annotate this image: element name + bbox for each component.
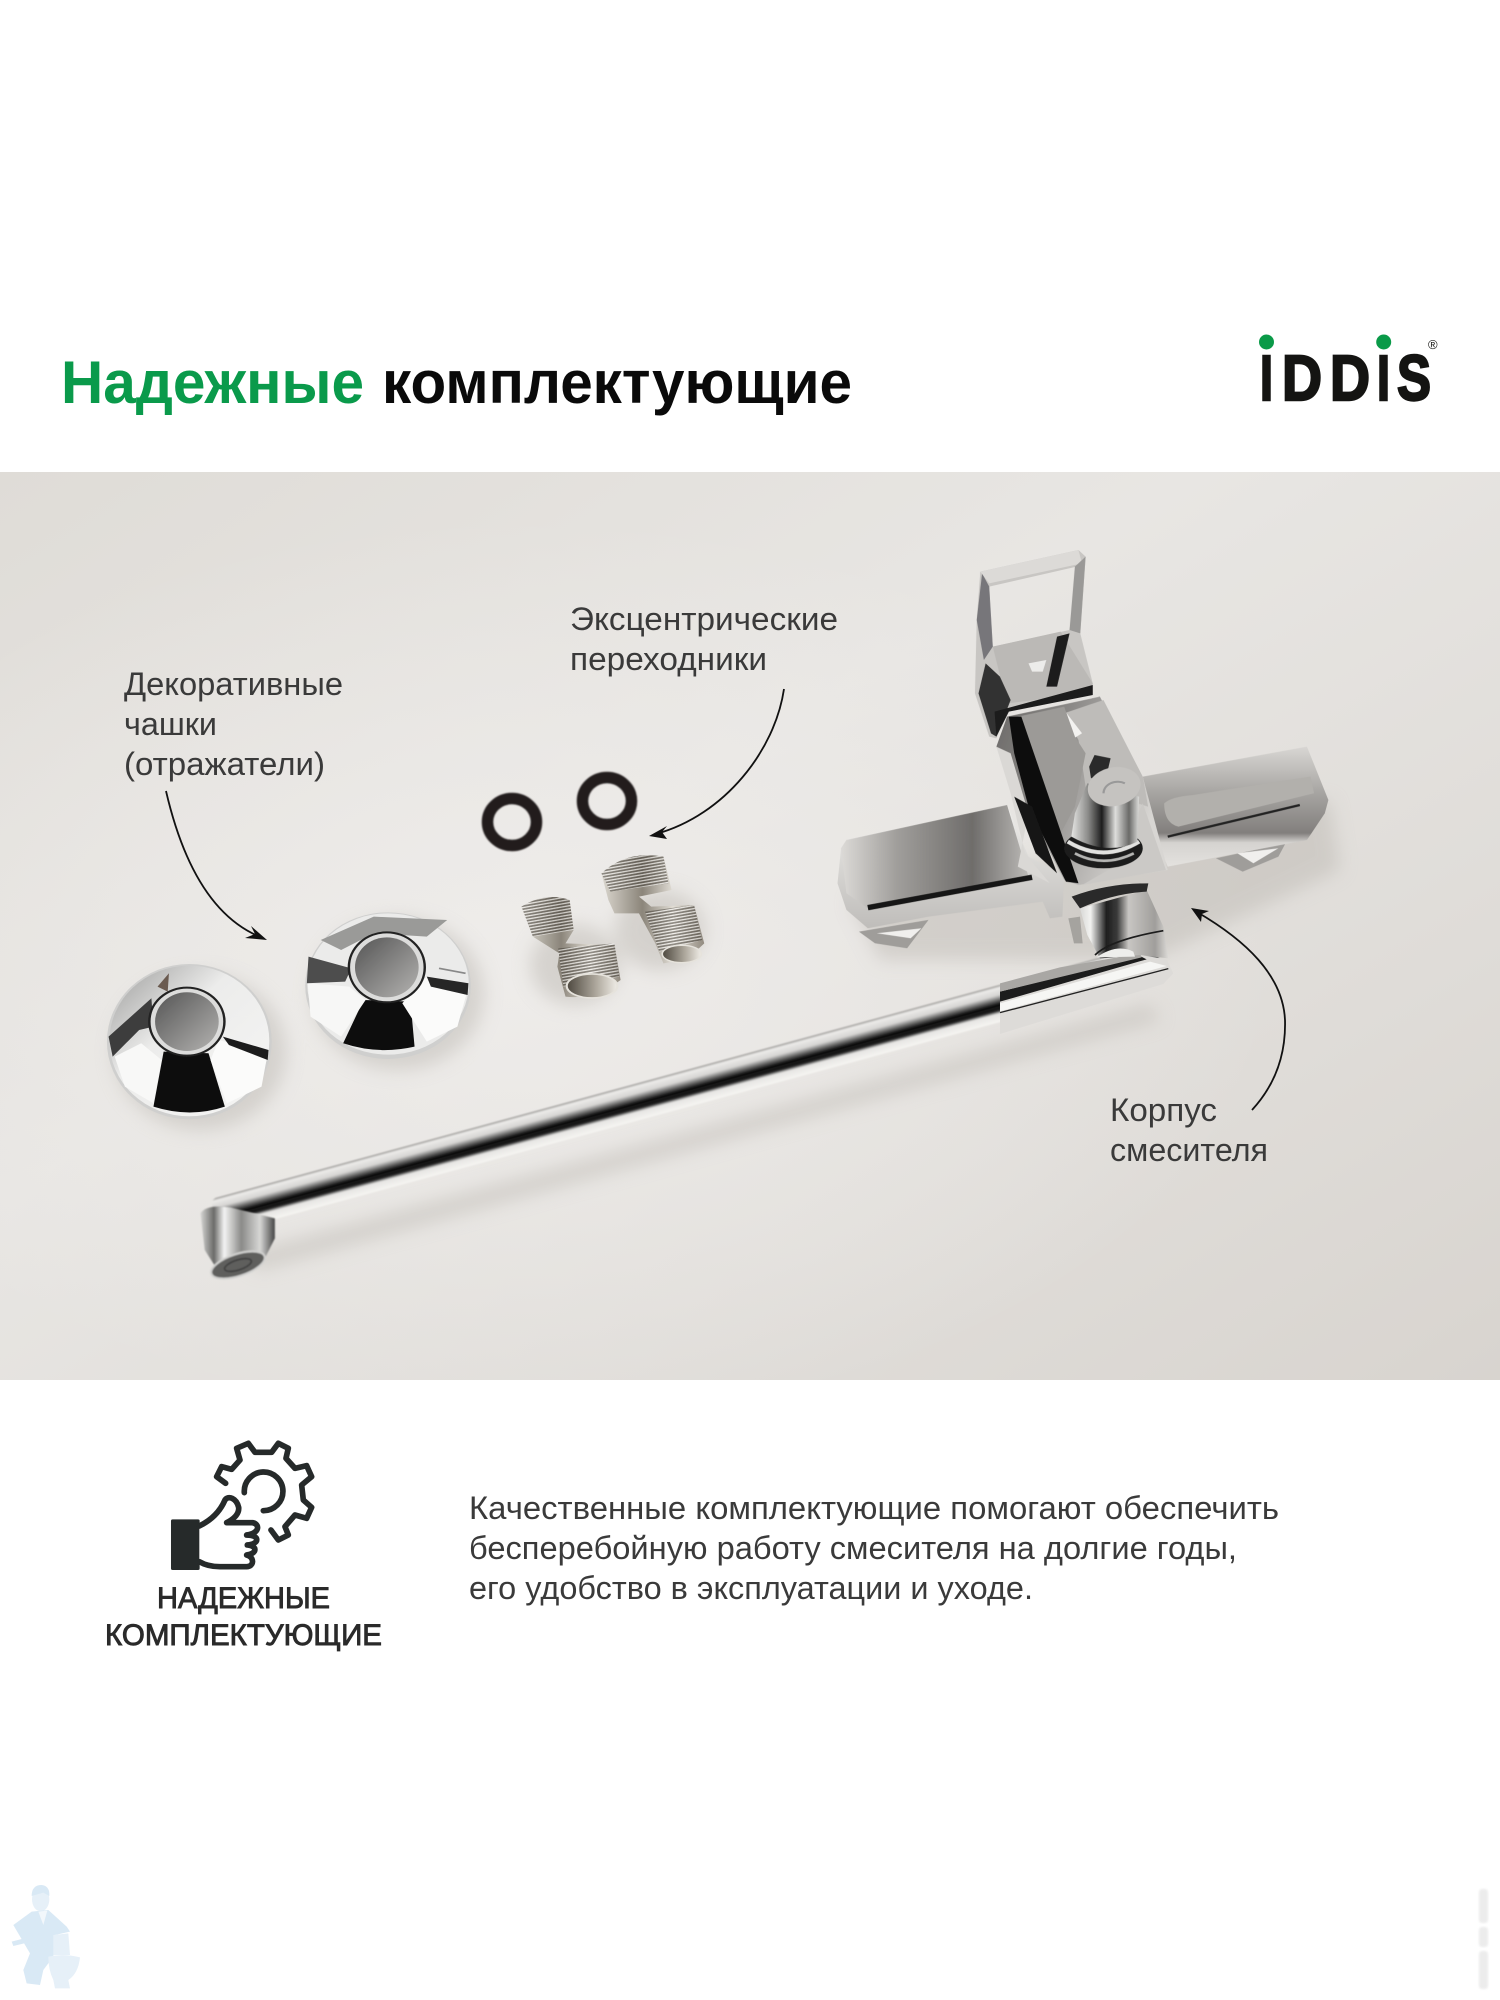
label: decorative cups: (отражатели) bbox=[124, 746, 325, 782]
label: faucet body bbox=[1110, 1092, 1268, 1168]
panel: product photo bbox=[0, 472, 1500, 1380]
right arm bbox=[1143, 747, 1328, 867]
spout tip with aerator bbox=[201, 1206, 275, 1284]
description text: бесперебойную работу смесителя на долгие годы, bbox=[469, 1530, 1237, 1566]
label: eccentric adapters: переходники bbox=[570, 641, 767, 677]
escutcheons (decorative cups) bbox=[107, 855, 704, 1119]
logo: IDDIS: D bbox=[1330, 342, 1370, 414]
shadows under products bbox=[114, 800, 1340, 1270]
left adapter bbox=[521, 897, 621, 998]
faucet body bbox=[837, 550, 1328, 948]
arrow: to decorative cups bbox=[166, 791, 267, 940]
icon: thumbs up with gear bbox=[171, 1443, 312, 1570]
icon caption bbox=[105, 1582, 382, 1652]
rubber washers bbox=[488, 778, 632, 846]
description text bbox=[469, 1490, 1279, 1606]
logo: IDDIS: I bbox=[1260, 342, 1273, 414]
description text: его удобство в эксплуатации и уходе. bbox=[469, 1570, 1033, 1606]
label: eccentric adapters bbox=[570, 601, 838, 677]
label: decorative cups: чашки bbox=[124, 706, 217, 742]
description text: Качественные комплектующие помогают обеспечить bbox=[469, 1490, 1279, 1526]
label: faucet body: Корпус bbox=[1110, 1092, 1217, 1128]
title bbox=[61, 349, 852, 416]
mounting nuts bbox=[859, 920, 929, 948]
right cup bbox=[305, 912, 471, 1059]
title: комплектующие bbox=[382, 349, 852, 416]
label: decorative cups: Декоративные bbox=[124, 666, 343, 702]
diverter knob bbox=[1064, 828, 1143, 868]
left cup bbox=[107, 964, 272, 1119]
logo: IDDIS: D bbox=[1282, 342, 1322, 414]
swivel collar and spout elbow bbox=[1000, 883, 1173, 1034]
logo: IDDIS: I bbox=[1377, 342, 1390, 414]
handle loop bbox=[975, 550, 1093, 738]
arrow: to faucet body bbox=[1191, 908, 1285, 1110]
right adapter bbox=[601, 855, 704, 963]
logo: IDDIS: ® bbox=[1428, 337, 1438, 352]
icon caption: НАДЕЖНЫЕ bbox=[157, 1582, 330, 1615]
arrow: to adapters bbox=[649, 689, 784, 839]
spout tube bbox=[211, 943, 1164, 1234]
logo: IDDIS bbox=[1259, 334, 1438, 414]
title: Надежные bbox=[61, 349, 364, 416]
central housing bbox=[996, 697, 1168, 885]
logo: IDDIS: S bbox=[1397, 342, 1431, 414]
label: decorative cups bbox=[124, 666, 343, 782]
watermark icon: plumber with toilet bbox=[12, 1885, 80, 1988]
watermark strip at lower right bbox=[1479, 1889, 1488, 1989]
label: faucet body: смесителя bbox=[1110, 1132, 1268, 1168]
icon caption: КОМПЛЕКТУЮЩИЕ bbox=[105, 1619, 382, 1652]
left arm bbox=[837, 805, 1064, 928]
label: eccentric adapters: Эксцентрические bbox=[570, 601, 838, 637]
